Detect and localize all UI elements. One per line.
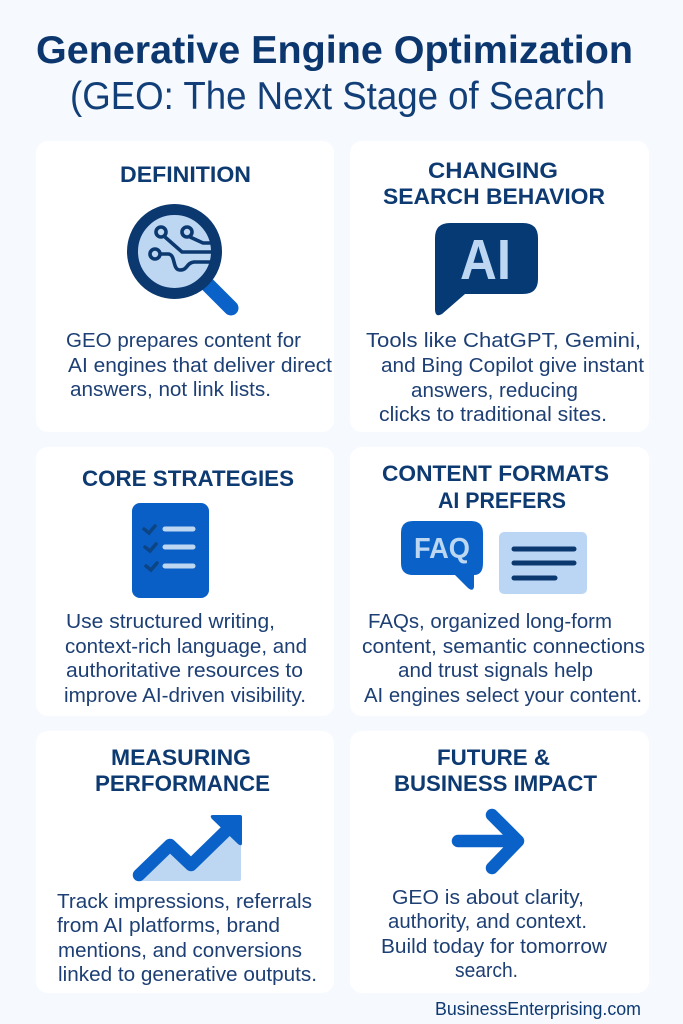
body text: content formats: FAQs, organized long-form [368,610,612,633]
body text: content formats: content, semantic connections [362,635,645,658]
heading: changing search behavior: SEARCH BEHAVIOR [383,184,605,209]
body text: core strategies: improve AI-driven visibility. [64,684,306,707]
icon: FAQ speech bubble: FAQ [414,533,470,565]
heading: changing search behavior [383,158,605,209]
body text: measuring performance: linked to generative outputs. [58,963,317,986]
body text: future and business impact: authority, and context. [388,910,587,933]
body text: changing search behavior: answers, reducing [411,379,578,402]
heading: content formats AI prefers [382,461,609,513]
panel: future and business impact [350,731,649,993]
body text: future and business impact [381,886,607,982]
heading: measuring performance: MEASURING [111,745,251,770]
body text: future and business impact: Build today for tomorrow [381,935,607,958]
body text: changing search behavior: Tools like ChatGPT, Gemini, [366,329,641,352]
body text: measuring performance: mentions, and conversions [58,939,302,962]
body text: content formats: AI engines select your content. [364,684,642,707]
body text: core strategies: authoritative resources to [66,659,303,682]
icon: AI speech bubble: AI [460,228,511,292]
body text: measuring performance: from AI platforms, brand [57,914,280,937]
panel: core strategies [36,447,334,716]
panel: content formats AI prefers [350,447,649,716]
body text: core strategies: Use structured writing, [66,610,275,633]
body text: definition: answers, not link lists. [70,378,271,401]
body text: content formats: and trust signals help [398,659,593,682]
body text: definition [66,329,332,401]
body text: changing search behavior [366,329,644,426]
panel: definition [36,141,334,432]
heading: core strategies: CORE STRATEGIES [82,466,294,491]
body text: definition: GEO prepares content for [66,329,301,352]
title: (GEO: The Next Stage of Search [70,75,605,118]
icon: AI speech bubble [435,223,538,315]
icon: rising line chart [139,815,242,881]
heading: changing search behavior: CHANGING [428,158,558,183]
body text: content formats [362,610,645,707]
body text: definition: AI engines that deliver direct [68,354,332,377]
heading: measuring performance [95,745,270,796]
body text: changing search behavior: clicks to traditional sites. [379,403,607,426]
heading: content formats AI prefers: CONTENT FORMATS [382,461,609,486]
footer: website: BusinessEnterprising.com [435,999,641,1019]
heading: future and business impact: BUSINESS IMPACT [394,771,597,796]
body text: changing search behavior: and Bing Copilot give instant [381,354,644,377]
icon: checklist document [132,503,209,598]
title [36,29,633,118]
body text: measuring performance [57,890,317,986]
icon: right arrow [458,815,518,868]
body text: measuring performance: Track impressions, referrals [57,890,312,913]
heading: definition: DEFINITION [120,162,251,187]
heading: content formats AI prefers: AI PREFERS [438,488,566,513]
heading: future and business impact: FUTURE & [437,745,550,770]
heading: future and business impact [394,745,597,796]
panel: changing search behavior [350,141,649,432]
icon: text document [499,532,587,594]
icon: FAQ speech bubble [401,521,483,590]
body text: future and business impact: search. [455,959,518,982]
body text: core strategies [64,610,307,707]
body text: core strategies: context-rich language, and [65,635,307,658]
heading: measuring performance: PERFORMANCE [95,771,270,796]
panel: measuring performance [36,731,334,993]
body text: future and business impact: GEO is about clarity, [392,886,584,909]
title: Generative Engine Optimization [36,29,633,72]
icon: magnifying glass with circuit [132,210,231,308]
